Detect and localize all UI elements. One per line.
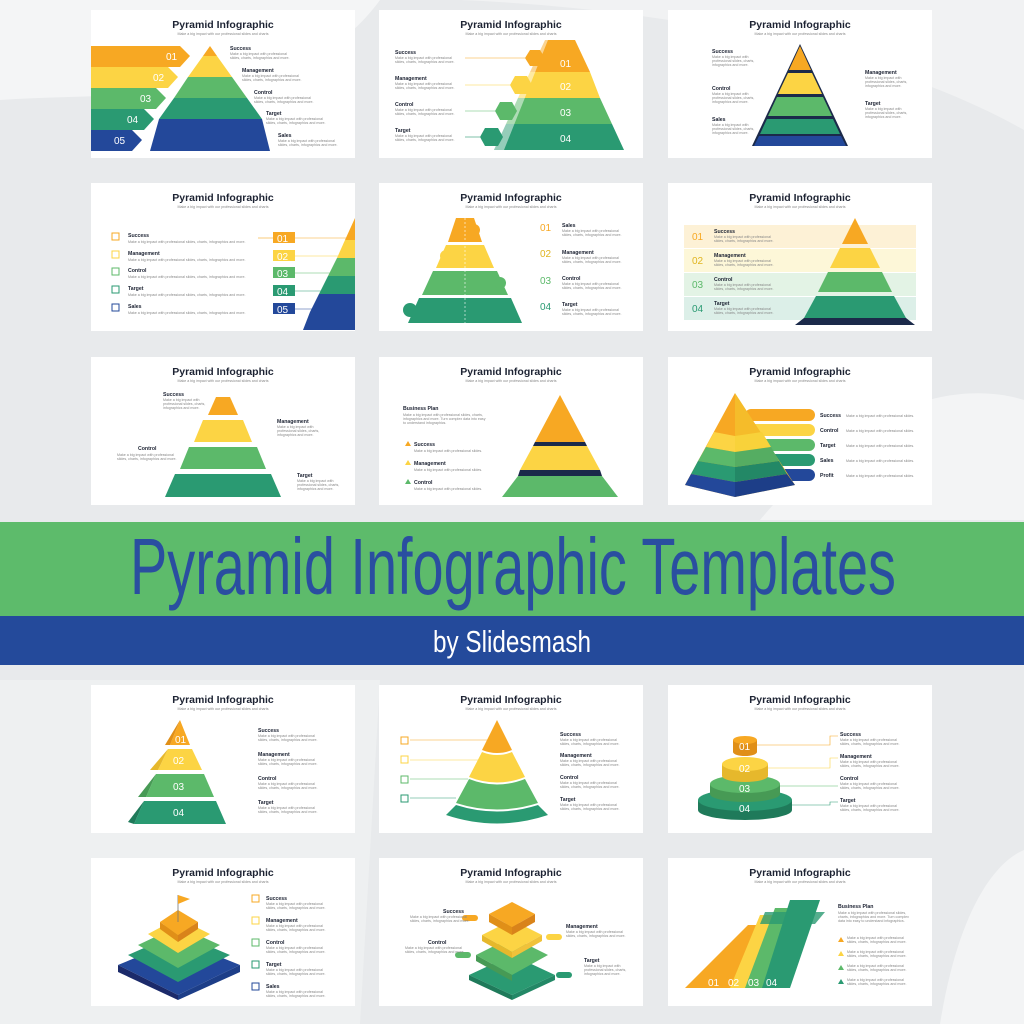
card 15: slanted band pyramid <box>668 858 932 1006</box>
card 3: dark outlined pyramid: Pyramid Infographic <box>749 19 851 31</box>
card 5: rounded stacked pyramid: Make a big impact with professional <box>562 256 619 260</box>
card 4: numbered list with partial pyramid: Make a big impact with our professional slides and charts <box>177 205 269 209</box>
card 9: 3D pyramid with tabs: Success <box>820 413 841 419</box>
card 3: dark outlined pyramid: professional slides, charts, <box>865 80 907 84</box>
card 6: rows with pyramid: 04 <box>692 304 704 315</box>
card 13: isometric stepped pyramid with flag: slides, charts, infographics and more. <box>266 906 326 910</box>
card 13: isometric stepped pyramid with flag: Make a big impact with professional <box>266 902 323 906</box>
card 9: 3D pyramid with tabs: Profit <box>820 473 834 479</box>
card 10: 3D numbered pyramid: 02 <box>173 756 185 767</box>
card 11: cone pyramid: Target <box>560 797 576 803</box>
card 4: numbered list with partial pyramid: Make a big impact with professional slides, charts, infographics and more. <box>128 240 245 244</box>
card 3: dark outlined pyramid: infographics and more. <box>712 131 749 135</box>
card 9: 3D pyramid with tabs: Make a big impact with professional slides. <box>846 414 914 418</box>
card 8: business plan pyramid: infographics and more. Turn complex data into easy <box>403 417 486 421</box>
card 12: stacked cylinders: Make a big impact with professional <box>840 804 897 808</box>
card 11: cone pyramid: slides, charts, infographics and more. <box>560 742 620 746</box>
card 7: separated pyramid with alternating labels: Target <box>297 473 313 479</box>
card 9: 3D pyramid with tabs: Make a big impact with professional slides. <box>846 444 914 448</box>
card 2: pyramid with icon hexagons: Management <box>395 76 427 82</box>
card 4: numbered list with partial pyramid: 05 <box>277 305 289 316</box>
card 11: cone pyramid: Success <box>560 732 581 738</box>
card 6: rows with pyramid: Make a big impact with professional <box>714 259 771 263</box>
card 15: slanted band pyramid: slides, charts, infographics and more. <box>847 968 907 972</box>
card 12: stacked cylinders: 02 <box>739 764 751 775</box>
card 8: business plan pyramid: Make a big impact with professional slides. <box>414 468 482 472</box>
card 7: separated pyramid with alternating labels: professional slides, charts, <box>297 483 339 487</box>
card 1: pyramid with arrows: 04 <box>127 115 139 126</box>
card 10: 3D numbered pyramid: Make a big impact with professional <box>258 734 315 738</box>
card 8: business plan pyramid: Pyramid Infographic <box>460 366 562 378</box>
card 3: dark outlined pyramid: Make a big impact with <box>712 123 749 127</box>
card 5: rounded stacked pyramid: Make a big impact with professional <box>562 308 619 312</box>
card 5: rounded stacked pyramid: 04 <box>540 302 552 313</box>
card 13: isometric stepped pyramid with flag: slides, charts, infographics and more. <box>266 928 326 932</box>
card 7: separated pyramid with alternating labels: Control <box>138 446 157 452</box>
card 4: numbered list with partial pyramid: Make a big impact with professional slides, charts, infographics and more. <box>128 311 245 315</box>
card 5: rounded stacked pyramid: slides, charts, infographics and more. <box>562 260 622 264</box>
card 8: business plan pyramid: Control <box>414 480 433 486</box>
card 9: 3D pyramid with tabs <box>668 357 932 505</box>
card 10: 3D numbered pyramid: Make a big impact with professional <box>258 806 315 810</box>
card 15: slanted band pyramid: data into easy to understand infographics. <box>838 919 905 923</box>
card 6: rows with pyramid: Pyramid Infographic <box>749 192 851 204</box>
card 2: pyramid with icon hexagons: slides, charts, infographics and more. <box>395 112 455 116</box>
card 15: slanted band pyramid: 04 <box>766 978 778 989</box>
card 15: slanted band pyramid: Pyramid Infographic <box>749 867 851 879</box>
card 10: 3D numbered pyramid: 04 <box>173 808 185 819</box>
card 14: isometric layered stack: slides, charts, infographics and more. <box>566 934 626 938</box>
card 10: 3D numbered pyramid: Make a big impact with professional <box>258 782 315 786</box>
card 4: numbered list with partial pyramid: 04 <box>277 287 289 298</box>
card 2: pyramid with icon hexagons: 03 <box>560 108 572 119</box>
card 6: rows with pyramid: Target <box>714 301 730 307</box>
card 7: separated pyramid with alternating labels: infographics and more. <box>277 433 314 437</box>
card 1: pyramid with arrows: Pyramid Infographic <box>172 19 274 31</box>
card 10: 3D numbered pyramid: slides, charts, infographics and more. <box>258 786 318 790</box>
card 11: cone pyramid <box>379 685 643 833</box>
card 4: numbered list with partial pyramid: Control <box>128 268 147 274</box>
card 2: pyramid with icon hexagons: Success <box>395 50 416 56</box>
card 11: cone pyramid: Control <box>560 775 579 781</box>
card 3: dark outlined pyramid <box>668 10 932 158</box>
card 4: numbered list with partial pyramid: Make a big impact with professional slides, charts, infographics and more. <box>128 293 245 297</box>
card 14: isometric layered stack: Make a big impact with professional <box>405 946 462 950</box>
card 6: rows with pyramid: Management <box>714 253 746 259</box>
card 3: dark outlined pyramid: Success <box>712 49 733 55</box>
card 7: separated pyramid with alternating labels: infographics and more. <box>163 406 200 410</box>
card 4: numbered list with partial pyramid <box>91 183 355 331</box>
card 5: rounded stacked pyramid: slides, charts, infographics and more. <box>562 312 622 316</box>
card 12: stacked cylinders: slides, charts, infographics and more. <box>840 742 900 746</box>
card 2: pyramid with icon hexagons <box>379 10 643 158</box>
card 11: cone pyramid: Make a big impact with professional <box>560 738 617 742</box>
card 3: dark outlined pyramid: infographics and more. <box>865 115 902 119</box>
card 1: pyramid with arrows: Make a big impact with professional <box>254 96 311 100</box>
card 9: 3D pyramid with tabs: Make a big impact with professional slides. <box>846 474 914 478</box>
card 4: numbered list with partial pyramid: Pyramid Infographic <box>172 192 274 204</box>
card 13: isometric stepped pyramid with flag: Control <box>266 940 285 946</box>
card 7: separated pyramid with alternating labels: Make a big impact with <box>277 425 314 429</box>
card 14: isometric layered stack: Control <box>428 940 447 946</box>
card 9: 3D pyramid with tabs: Make a big impact with professional slides. <box>846 429 914 433</box>
card 7: separated pyramid with alternating labels: professional slides, charts, <box>163 402 205 406</box>
card 3: dark outlined pyramid: Control <box>712 86 731 92</box>
card 5: rounded stacked pyramid: slides, charts, infographics and more. <box>562 233 622 237</box>
card 4: numbered list with partial pyramid: 03 <box>277 269 289 280</box>
card 15: slanted band pyramid: 03 <box>748 978 760 989</box>
banner: byline <box>0 616 1024 665</box>
card 11: cone pyramid: Make a big impact with professional <box>560 759 617 763</box>
card 1: pyramid with arrows <box>91 10 355 158</box>
card 6: rows with pyramid: Make a big impact with our professional slides and charts <box>754 205 846 209</box>
card 1: pyramid with arrows: Make a big impact with our professional slides and charts <box>177 32 269 36</box>
card 7: separated pyramid with alternating labels: Make a big impact with professional <box>117 453 174 457</box>
card 12: stacked cylinders: 01 <box>739 742 751 753</box>
card 2: pyramid with icon hexagons: Make a big impact with professional <box>395 108 452 112</box>
card 1: pyramid with arrows: Make a big impact with professional <box>242 74 299 78</box>
card 8: business plan pyramid <box>379 357 643 505</box>
card 6: rows with pyramid: slides, charts, infographics and more. <box>714 287 774 291</box>
card 14: isometric layered stack: Management <box>566 924 598 930</box>
card 14: isometric layered stack: infographics and more. <box>584 972 621 976</box>
card 15: slanted band pyramid: Make a big impact with professional <box>847 950 904 954</box>
card 6: rows with pyramid: Make a big impact with professional <box>714 283 771 287</box>
card 12: stacked cylinders: Make a big impact with professional <box>840 782 897 786</box>
card 15: slanted band pyramid: Business Plan <box>838 904 873 910</box>
card 13: isometric stepped pyramid with flag: Make a big impact with our professional slides and charts <box>177 880 269 884</box>
card 1: pyramid with arrows: 02 <box>153 73 165 84</box>
card 2: pyramid with icon hexagons: Make a big impact with professional <box>395 56 452 60</box>
card 14: isometric layered stack: professional slides, charts, <box>584 968 626 972</box>
card 10: 3D numbered pyramid: Management <box>258 752 290 758</box>
card 11: cone pyramid: slides, charts, infographics and more. <box>560 763 620 767</box>
card 13: isometric stepped pyramid with flag: slides, charts, infographics and more. <box>266 950 326 954</box>
card 4: numbered list with partial pyramid: Make a big impact with professional slides, charts, infographics and more. <box>128 258 245 262</box>
card 2: pyramid with icon hexagons: 04 <box>560 134 572 145</box>
card 4: numbered list with partial pyramid: Make a big impact with professional slides, charts, infographics and more. <box>128 275 245 279</box>
card 4: numbered list with partial pyramid: Success <box>128 233 149 239</box>
card 9: 3D pyramid with tabs: Sales <box>820 458 834 464</box>
card 8: business plan pyramid: Make a big impact with professional slides. <box>414 487 482 491</box>
card 5: rounded stacked pyramid: Sales <box>562 223 576 229</box>
card 7: separated pyramid with alternating labels <box>91 357 355 505</box>
card 15: slanted band pyramid: Make a big impact with professional <box>847 936 904 940</box>
card 13: isometric stepped pyramid with flag: Management <box>266 918 298 924</box>
card 7: separated pyramid with alternating labels: infographics and more. <box>297 487 334 491</box>
card 13: isometric stepped pyramid with flag: Make a big impact with professional <box>266 990 323 994</box>
card 8: business plan pyramid: Business Plan <box>403 406 438 412</box>
card 10: 3D numbered pyramid: Success <box>258 728 279 734</box>
card 15: slanted band pyramid: Make a big impact with professional <box>847 964 904 968</box>
card 7: separated pyramid with alternating labels: Pyramid Infographic <box>172 366 274 378</box>
card 2: pyramid with icon hexagons: slides, charts, infographics and more. <box>395 86 455 90</box>
card 13: isometric stepped pyramid with flag: Target <box>266 962 282 968</box>
card 15: slanted band pyramid: slides, charts, infographics and more. <box>847 982 907 986</box>
card 3: dark outlined pyramid: infographics and more. <box>712 63 749 67</box>
card 9: 3D pyramid with tabs: Target <box>820 443 836 449</box>
card 2: pyramid with icon hexagons: slides, charts, infographics and more. <box>395 60 455 64</box>
card 7: separated pyramid with alternating labels: Make a big impact with our professional slides and charts <box>177 379 269 383</box>
card 12: stacked cylinders: Make a big impact with professional <box>840 760 897 764</box>
card 1: pyramid with arrows: Success <box>230 46 251 52</box>
card 14: isometric layered stack: slides, charts, infographics and more. <box>405 950 465 954</box>
card 1: pyramid with arrows: slides, charts, infographics and more. <box>242 78 302 82</box>
card 1: pyramid with arrows: slides, charts, infographics and more. <box>230 56 290 60</box>
card 5: rounded stacked pyramid: 01 <box>540 223 552 234</box>
card 11: cone pyramid: Management <box>560 753 592 759</box>
card 10: 3D numbered pyramid: 03 <box>173 782 185 793</box>
card 12: stacked cylinders: slides, charts, infographics and more. <box>840 786 900 790</box>
card 13: isometric stepped pyramid with flag: Sales <box>266 984 280 990</box>
card 3: dark outlined pyramid: Make a big impact with <box>712 92 749 96</box>
card 3: dark outlined pyramid: infographics and more. <box>865 84 902 88</box>
card 12: stacked cylinders: Control <box>840 776 859 782</box>
card 2: pyramid with icon hexagons: 02 <box>560 82 572 93</box>
card 13: isometric stepped pyramid with flag: slides, charts, infographics and more. <box>266 972 326 976</box>
card 13: isometric stepped pyramid with flag: Success <box>266 896 287 902</box>
card 14: isometric layered stack: slides, charts, infographics and more. <box>410 919 470 923</box>
card 8: business plan pyramid: Success <box>414 442 435 448</box>
card 14: isometric layered stack: Make a big impact with <box>584 964 621 968</box>
card 1: pyramid with arrows: 01 <box>166 52 178 63</box>
card 13: isometric stepped pyramid with flag: Make a big impact with professional <box>266 924 323 928</box>
card 10: 3D numbered pyramid: Make a big impact with professional <box>258 758 315 762</box>
card 9: 3D pyramid with tabs: Pyramid Infographic <box>749 366 851 378</box>
card 12: stacked cylinders: Success <box>840 732 861 738</box>
card 15: slanted band pyramid: slides, charts, infographics and more. <box>847 954 907 958</box>
card 3: dark outlined pyramid: professional slides, charts, <box>712 96 754 100</box>
card 1: pyramid with arrows: Sales <box>278 133 292 139</box>
card 2: pyramid with icon hexagons: Make a big impact with professional <box>395 82 452 86</box>
card 9: 3D pyramid with tabs: Make a big impact with professional slides. <box>846 459 914 463</box>
card 15: slanted band pyramid: 01 <box>708 978 720 989</box>
card 10: 3D numbered pyramid: slides, charts, infographics and more. <box>258 738 318 742</box>
card 12: stacked cylinders: 04 <box>739 804 751 815</box>
card 2: pyramid with icon hexagons: Make a big impact with professional <box>395 134 452 138</box>
card 2: pyramid with icon hexagons: 01 <box>560 59 572 70</box>
card 12: stacked cylinders: Target <box>840 798 856 804</box>
card 14: isometric layered stack: Make a big impact with professional <box>566 930 623 934</box>
card 11: cone pyramid: Make a big impact with our professional slides and charts <box>465 707 557 711</box>
card 1: pyramid with arrows: 03 <box>140 94 152 105</box>
card 5: rounded stacked pyramid: 02 <box>540 249 552 260</box>
card 10: 3D numbered pyramid: Make a big impact with our professional slides and charts <box>177 707 269 711</box>
card 5: rounded stacked pyramid: slides, charts, infographics and more. <box>562 286 622 290</box>
card 13: isometric stepped pyramid with flag: Pyramid Infographic <box>172 867 274 879</box>
card 10: 3D numbered pyramid: slides, charts, infographics and more. <box>258 810 318 814</box>
card 4: numbered list with partial pyramid: 01 <box>277 234 289 245</box>
card 6: rows with pyramid: 01 <box>692 232 704 243</box>
card 7: separated pyramid with alternating labels: Make a big impact with <box>163 398 200 402</box>
card 15: slanted band pyramid: Make a big impact with professional <box>847 978 904 982</box>
card 11: cone pyramid: Make a big impact with professional <box>560 803 617 807</box>
card 12: stacked cylinders <box>668 685 932 833</box>
card 11: cone pyramid: Make a big impact with professional <box>560 781 617 785</box>
card 4: numbered list with partial pyramid: Sales <box>128 304 142 310</box>
card 3: dark outlined pyramid: professional slides, charts, <box>865 111 907 115</box>
card 6: rows with pyramid: slides, charts, infographics and more. <box>714 311 774 315</box>
card 5: rounded stacked pyramid: Pyramid Infographic <box>460 192 562 204</box>
card 13: isometric stepped pyramid with flag: slides, charts, infographics and more. <box>266 994 326 998</box>
card 6: rows with pyramid: 03 <box>692 280 704 291</box>
card 4: numbered list with partial pyramid: 02 <box>277 252 289 263</box>
card 14: isometric layered stack: Make a big impact with our professional slides and charts <box>465 880 557 884</box>
card 2: pyramid with icon hexagons: Control <box>395 102 414 108</box>
card 6: rows with pyramid: 02 <box>692 256 704 267</box>
card 10: 3D numbered pyramid <box>91 685 355 833</box>
card 15: slanted band pyramid: charts, infographics and more. Turn complex <box>838 915 909 919</box>
card 2: pyramid with icon hexagons: slides, charts, infographics and more. <box>395 138 455 142</box>
card 1: pyramid with arrows: slides, charts, infographics and more. <box>278 143 338 147</box>
card 6: rows with pyramid: Control <box>714 277 733 283</box>
card 8: business plan pyramid: Make a big impact with our professional slides and charts <box>465 379 557 383</box>
card 5: rounded stacked pyramid: Management <box>562 250 594 256</box>
card 3: dark outlined pyramid: Make a big impact with <box>865 76 902 80</box>
card 3: dark outlined pyramid: Make a big impact with <box>712 55 749 59</box>
banner: byline: by Slidesmash <box>433 624 591 659</box>
card 13: isometric stepped pyramid with flag: Make a big impact with professional <box>266 968 323 972</box>
card 8: business plan pyramid: Management <box>414 461 446 467</box>
card 15: slanted band pyramid: 02 <box>728 978 740 989</box>
card 1: pyramid with arrows: slides, charts, infographics and more. <box>266 121 326 125</box>
card 1: pyramid with arrows: 05 <box>114 136 126 147</box>
card 12: stacked cylinders: Management <box>840 754 872 760</box>
card 10: 3D numbered pyramid: 01 <box>175 735 187 746</box>
card 14: isometric layered stack: Success <box>443 909 464 915</box>
card 4: numbered list with partial pyramid: Target <box>128 286 144 292</box>
card 6: rows with pyramid: slides, charts, infographics and more. <box>714 239 774 243</box>
card 10: 3D numbered pyramid: Control <box>258 776 277 782</box>
card 11: cone pyramid: Pyramid Infographic <box>460 694 562 706</box>
card 4: numbered list with partial pyramid: Management <box>128 251 160 257</box>
card 3: dark outlined pyramid: Target <box>865 101 881 107</box>
card 15: slanted band pyramid: Make a big impact with professional slides, <box>838 911 906 915</box>
card 13: isometric stepped pyramid with flag: Make a big impact with professional <box>266 946 323 950</box>
card 12: stacked cylinders: 03 <box>739 784 751 795</box>
card 12: stacked cylinders: slides, charts, infographics and more. <box>840 764 900 768</box>
card 10: 3D numbered pyramid: slides, charts, infographics and more. <box>258 762 318 766</box>
card 8: business plan pyramid: Make a big impact with professional slides. <box>414 449 482 453</box>
card 5: rounded stacked pyramid: 03 <box>540 276 552 287</box>
card 3: dark outlined pyramid: Sales <box>712 117 726 123</box>
card 12: stacked cylinders: Pyramid Infographic <box>749 694 851 706</box>
card 12: stacked cylinders: slides, charts, infographics and more. <box>840 808 900 812</box>
card 3: dark outlined pyramid: infographics and more. <box>712 100 749 104</box>
card 1: pyramid with arrows: Make a big impact with professional <box>230 52 287 56</box>
card 6: rows with pyramid: Success <box>714 229 735 235</box>
card 1: pyramid with arrows: slides, charts, infographics and more. <box>254 100 314 104</box>
card 7: separated pyramid with alternating labels: professional slides, charts, <box>277 429 319 433</box>
card 10: 3D numbered pyramid: Pyramid Infographic <box>172 694 274 706</box>
card 7: separated pyramid with alternating labels: Make a big impact with <box>297 479 334 483</box>
card 11: cone pyramid: slides, charts, infographics and more. <box>560 785 620 789</box>
card 10: 3D numbered pyramid: Target <box>258 800 274 806</box>
card 7: separated pyramid with alternating labels: Management <box>277 419 309 425</box>
card 3: dark outlined pyramid: professional slides, charts, <box>712 59 754 63</box>
card 15: slanted band pyramid: slides, charts, infographics and more. <box>847 940 907 944</box>
card 14: isometric layered stack: Target <box>584 958 600 964</box>
card 9: 3D pyramid with tabs: Make a big impact with our professional slides and charts <box>754 379 846 383</box>
card 1: pyramid with arrows: Management <box>242 68 274 74</box>
card 2: pyramid with icon hexagons: Make a big impact with our professional slides and charts <box>465 32 557 36</box>
card 15: slanted band pyramid: Make a big impact with our professional slides and charts <box>754 880 846 884</box>
card 13: isometric stepped pyramid with flag <box>91 858 355 1006</box>
card 3: dark outlined pyramid: Make a big impact with <box>865 107 902 111</box>
card 6: rows with pyramid: Make a big impact with professional <box>714 307 771 311</box>
card 3: dark outlined pyramid: professional slides, charts, <box>712 127 754 131</box>
card 8: business plan pyramid: to understand infographics. <box>403 421 446 425</box>
card 14: isometric layered stack <box>379 858 643 1006</box>
card 14: isometric layered stack: Pyramid Infographic <box>460 867 562 879</box>
card 3: dark outlined pyramid: Management <box>865 70 897 76</box>
card 3: dark outlined pyramid: Make a big impact with our professional slides and charts <box>754 32 846 36</box>
card 5: rounded stacked pyramid: Make a big impact with professional <box>562 229 619 233</box>
card 1: pyramid with arrows: Control <box>254 90 273 96</box>
card 1: pyramid with arrows: Make a big impact with professional <box>278 139 335 143</box>
card 5: rounded stacked pyramid: Make a big impact with our professional slides and charts <box>465 205 557 209</box>
card 9: 3D pyramid with tabs: Control <box>820 428 839 434</box>
card 7: separated pyramid with alternating labels: Success <box>163 392 184 398</box>
card 12: stacked cylinders: Make a big impact with our professional slides and charts <box>754 707 846 711</box>
card 12: stacked cylinders: Make a big impact with professional <box>840 738 897 742</box>
card 11: cone pyramid: slides, charts, infographics and more. <box>560 807 620 811</box>
card 7: separated pyramid with alternating labels: slides, charts, infographics and more. <box>117 457 177 461</box>
card 14: isometric layered stack: Make a big impact with professional <box>410 915 467 919</box>
card 2: pyramid with icon hexagons: Pyramid Infographic <box>460 19 562 31</box>
card 8: business plan pyramid: Make a big impact with professional slides, charts, <box>403 413 483 417</box>
card 5: rounded stacked pyramid <box>379 183 643 331</box>
card 6: rows with pyramid: slides, charts, infographics and more. <box>714 263 774 267</box>
card 2: pyramid with icon hexagons: Target <box>395 128 411 134</box>
card 5: rounded stacked pyramid: Make a big impact with professional <box>562 282 619 286</box>
card 5: rounded stacked pyramid: Target <box>562 302 578 308</box>
card 6: rows with pyramid <box>668 183 932 331</box>
card 6: rows with pyramid: Make a big impact with professional <box>714 235 771 239</box>
card 1: pyramid with arrows: Target <box>266 111 282 117</box>
card 5: rounded stacked pyramid: Control <box>562 276 581 282</box>
card 1: pyramid with arrows: Make a big impact with professional <box>266 117 323 121</box>
